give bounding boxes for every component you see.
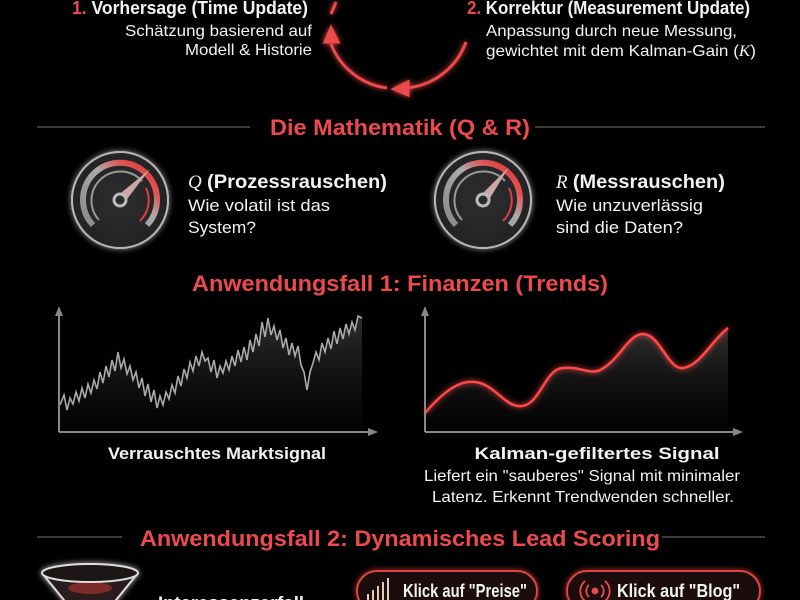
label: filtered signal: Liefert ein "sauberes" Signal mit minimaler — [424, 468, 741, 485]
step 2: correction text — [467, 0, 756, 60]
chart: Kalman filtered signal — [421, 306, 743, 436]
icon: gauge R — [435, 152, 531, 248]
icon: gauge Q — [72, 152, 168, 248]
text: Q Prozessrauschen: Q (Prozessrauschen) — [188, 172, 387, 193]
heading: Die Mathematik: Die Mathematik (Q & R) — [270, 115, 530, 140]
text: Q Prozessrauschen: System? — [188, 218, 256, 237]
icon: funnel — [42, 564, 138, 600]
text: R Messrauschen — [555, 172, 725, 237]
pill: Klick auf Blog — [567, 571, 760, 600]
label: filtered signal: Kalman-gefiltertes Signal — [474, 444, 720, 463]
text: Q Prozessrauschen: Wie volatil ist das — [188, 196, 330, 215]
step 1: prediction text: Schätzung basierend auf — [125, 23, 313, 40]
text: Q Prozessrauschen — [188, 172, 387, 237]
step 2: correction text: Anpassung durch neue Messung, — [486, 23, 737, 40]
label: noisy signal: Verrauschtes Marktsignal — [108, 444, 326, 463]
cycle arrows — [325, 2, 466, 95]
label: filtered signal: Latenz. Erkennt Trendwenden schneller. — [432, 489, 734, 506]
label: filtered signal — [424, 444, 741, 506]
step 1: prediction text — [72, 0, 313, 59]
heading: Anwendungsfall 1: Anwendungsfall 1: Finanzen (Trends) — [192, 271, 608, 296]
pill: Klick auf Preise — [357, 571, 537, 600]
heading: Anwendungsfall 2: Anwendungsfall 2: Dynamisches Lead Scoring — [140, 526, 660, 551]
chart: noisy market signal — [55, 306, 378, 436]
text: R Messrauschen: sind die Daten? — [556, 218, 683, 237]
text: R Messrauschen: R (Messrauschen) — [555, 172, 725, 193]
text: R Messrauschen: Wie unzuverlässig — [556, 196, 703, 215]
step 1: prediction text: Modell & Historie — [185, 42, 312, 59]
step 2: correction text: gewichtet mit dem Kalman-Gain ( K) — [486, 43, 756, 60]
